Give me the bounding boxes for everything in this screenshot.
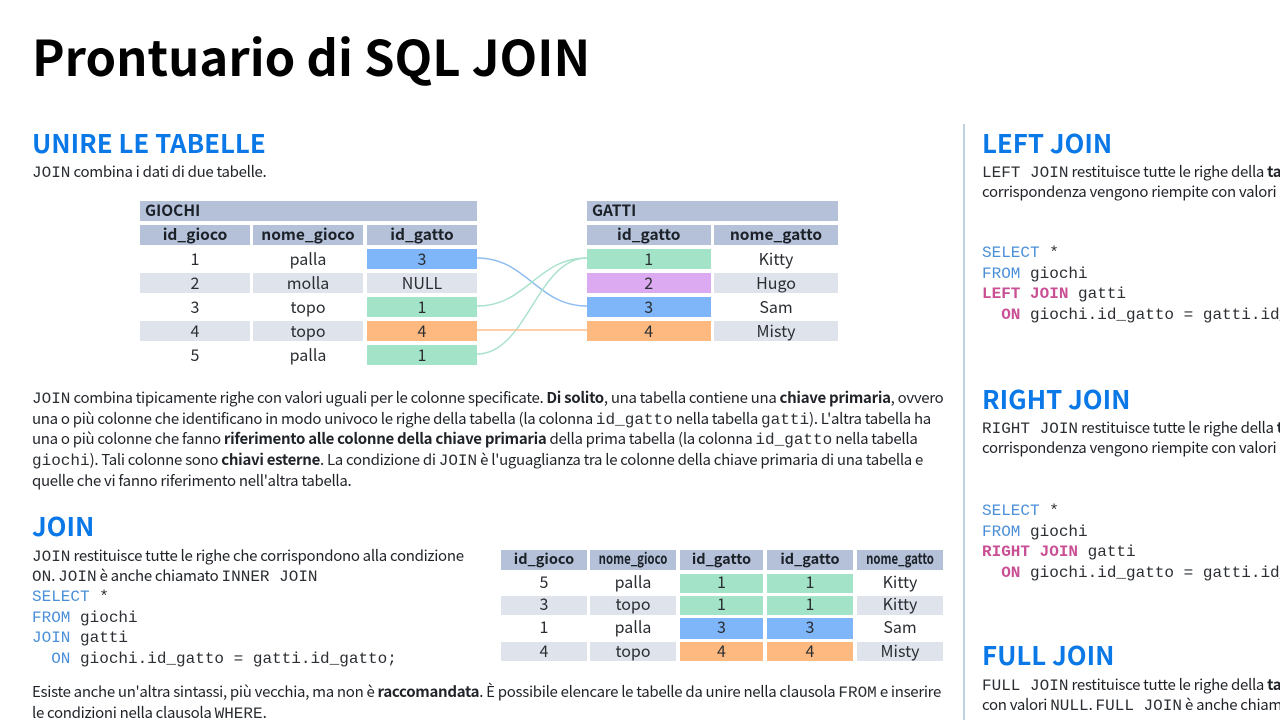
column header: nome_gatto: nome_gatto <box>730 223 822 245</box>
table title: gatti <box>587 201 838 221</box>
column divider <box>963 124 965 720</box>
table: risultato join: 3 <box>806 614 814 638</box>
connector lines between tables <box>477 257 587 355</box>
column header: nome_gatto: nome_gatto <box>866 548 934 569</box>
table: giochi: NULL <box>402 270 442 294</box>
code: join: JOIN gatti <box>32 629 128 647</box>
column header: id_gioco: id_gioco <box>163 223 227 245</box>
code: join: ON giochi.id_gatto = gatti.id_gatto; <box>51 650 397 668</box>
column header: nome_gatto <box>714 225 838 245</box>
code: left join: FROM giochi <box>982 265 1088 283</box>
column header: id_gioco <box>140 225 250 245</box>
column header: id_gatto: id_gatto <box>780 548 840 569</box>
text: sintassi alternativa: Esiste anche un'altra sintassi, più vecchia, ma non è raccomandata. È possibile elencare le tabelle da unire nella clausola FROM e inserire <box>32 681 941 702</box>
text: descrizione left join <box>982 161 1280 202</box>
table: risultato join: Kitty <box>883 591 917 615</box>
code: left join <box>982 244 1280 324</box>
table: risultato join: 5 <box>540 569 548 593</box>
table: giochi: molla <box>287 270 329 294</box>
code: right join: FROM giochi <box>982 523 1088 541</box>
table: risultato join: 4 <box>540 638 548 662</box>
table: risultato join: 1 <box>717 591 726 615</box>
table: risultato join: Sam <box>883 614 917 638</box>
heading: join: JOIN <box>32 507 94 544</box>
code: join: SELECT * <box>32 588 109 606</box>
table: gatti: Kitty <box>759 246 793 270</box>
column header: id_gatto: id_gatto <box>692 548 751 569</box>
table: risultato join: palla <box>615 614 651 638</box>
table: gatti: 1 <box>644 246 653 270</box>
table: giochi: 1 <box>418 342 426 366</box>
text: chiavi primarie ed esterne: una o più colonne che identificano in modo univoco le righe della tabella (la colonna id_gatto nella tabella gatti). L'altra tabella ha <box>32 408 931 429</box>
code: left join: SELECT * <box>982 244 1059 262</box>
text: sintassi alternativa <box>32 681 941 723</box>
panel: unire le tabelle <box>32 124 943 491</box>
text: descrizione join: ON. JOIN è anche chiamato INNER JOIN <box>32 565 318 586</box>
code: join: FROM giochi <box>32 609 138 627</box>
text: descrizione join <box>32 545 464 586</box>
table title: giochi: GIOCHI <box>145 199 200 221</box>
table: gatti: 2 <box>644 270 653 294</box>
table: giochi <box>140 199 477 366</box>
text: descrizione full join <box>982 674 1280 715</box>
table: risultato join: 4 <box>717 638 726 662</box>
table: risultato join: topo <box>615 591 651 615</box>
table: giochi: 3 <box>191 294 199 318</box>
column header: id_gatto: id_gatto <box>617 223 680 245</box>
title: Prontuario di SQL JOIN <box>32 20 590 91</box>
table: giochi: 4 <box>418 318 426 342</box>
text: chiavi primarie ed esterne: giochi). Tali colonne sono chiavi esterne. La condizione di JOIN è l'uguaglianza tra le colonne della chiave primaria di una tabella e <box>32 449 923 470</box>
column header: nome_gioco: nome_gioco <box>599 548 667 569</box>
column header: nome_gioco: nome_gioco <box>261 223 355 245</box>
table title: gatti: GATTI <box>592 199 636 221</box>
table: risultato join: Misty <box>881 638 919 662</box>
table: giochi: 1 <box>418 294 426 318</box>
heading: right join: RIGHT JOIN <box>982 381 1130 417</box>
column header: id_gatto: id_gatto <box>390 223 454 245</box>
table: giochi: 4 <box>191 318 199 342</box>
table: risultato join: palla <box>615 569 651 593</box>
code: left join: LEFT JOIN gatti <box>982 285 1126 303</box>
table: giochi: topo <box>290 294 326 318</box>
table: risultato join: Kitty <box>883 569 917 593</box>
table: risultato join: topo <box>615 638 651 662</box>
column header: id_gioco <box>501 550 587 570</box>
table: risultato join: 3 <box>540 591 548 615</box>
panel: left join <box>982 125 1280 324</box>
table: gatti: Sam <box>759 294 793 318</box>
code: join <box>32 588 397 668</box>
table: giochi: 3 <box>418 246 426 270</box>
table: gatti: 3 <box>644 294 653 318</box>
text: chiavi primarie ed esterne: una o più colonne che fanno riferimento alle colonne della chiave primaria della prima tabella (la colonna id_gatto nella tabella <box>32 428 917 449</box>
table: giochi: 5 <box>191 342 199 366</box>
table: giochi: 1 <box>191 246 199 270</box>
heading: left join: LEFT JOIN <box>982 125 1112 161</box>
text: chiavi primarie ed esterne <box>32 387 943 491</box>
table: giochi: palla <box>290 342 326 366</box>
column header: id_gatto <box>767 550 853 570</box>
table: giochi: palla <box>290 246 326 270</box>
column header: id_gioco: id_gioco <box>514 548 574 569</box>
panel: full join <box>982 637 1280 715</box>
panel: join <box>32 507 943 723</box>
table: gatti: Hugo <box>756 270 796 294</box>
text: sintassi alternativa: le condizioni nella clausola WHERE. <box>32 702 266 723</box>
table: risultato join <box>501 548 943 662</box>
panel: right join <box>982 381 1280 582</box>
column header: id_gatto <box>367 225 477 245</box>
text: intro: JOIN combina i dati di due tabelle. <box>32 161 266 182</box>
table: risultato join: 1 <box>540 614 548 638</box>
column header: nome_gatto <box>857 550 943 570</box>
code: right join: SELECT * <box>982 502 1059 520</box>
table: risultato join: 3 <box>717 614 726 638</box>
column header: id_gatto <box>680 550 763 570</box>
text: chiavi primarie ed esterne: quelle che vi fanno riferimento nell'altra tabella. <box>32 470 351 491</box>
table: risultato join: 1 <box>717 569 726 593</box>
text: chiavi primarie ed esterne: JOIN combina tipicamente righe con valori uguali per le colonne specificate. Di solito, una tabella contiene una chiave primaria, ovvero <box>32 387 943 408</box>
text: descrizione right join <box>982 417 1280 458</box>
table: giochi: 2 <box>191 270 199 294</box>
table: gatti <box>587 199 838 342</box>
table: giochi: topo <box>290 318 326 342</box>
table: risultato join: 1 <box>806 569 814 593</box>
code: right join: RIGHT JOIN gatti <box>982 543 1136 561</box>
heading: unire le tabelle: UNIRE LE TABELLE <box>32 124 266 161</box>
column header: id_gatto <box>587 225 710 245</box>
table: risultato join: 4 <box>806 638 814 662</box>
heading: full join: FULL JOIN <box>982 637 1114 673</box>
table title: giochi <box>140 201 477 221</box>
table: gatti: 4 <box>644 318 653 342</box>
table: risultato join: 1 <box>806 591 814 615</box>
code: right join <box>982 502 1280 582</box>
text: descrizione join: JOIN restituisce tutte le righe che corrispondono alla condizione <box>32 545 464 566</box>
table: gatti: Misty <box>757 318 795 342</box>
